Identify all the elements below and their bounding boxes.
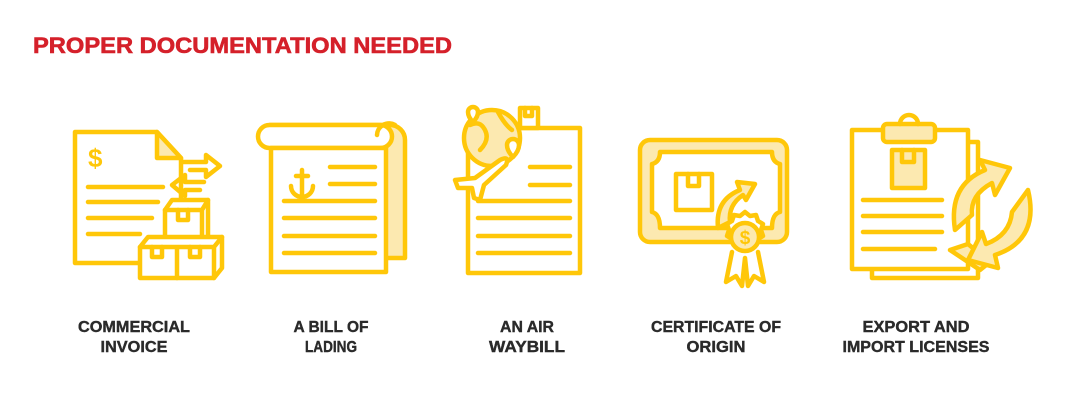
label: commercial invoice: INVOICE — [100, 339, 168, 356]
label: certificate of origin — [651, 319, 781, 356]
label: commercial invoice: COMMERCIAL — [78, 319, 190, 336]
label: export and import licenses: EXPORT AND — [862, 319, 970, 336]
label: certificate of origin: ORIGIN — [686, 339, 746, 356]
icon: export and import licenses — [852, 115, 1031, 278]
label: export and import licenses: IMPORT LICENSES — [842, 339, 990, 356]
label: bill of lading: A BILL OF — [294, 319, 369, 336]
label: air waybill: WAYBILL — [489, 339, 565, 356]
icon: commercial invoice — [75, 132, 222, 278]
icon: air waybill — [455, 107, 580, 273]
label: commercial invoice — [78, 319, 190, 356]
label: air waybill — [489, 319, 565, 356]
label: certificate of origin: CERTIFICATE OF — [651, 319, 781, 336]
label: bill of lading: LADING — [305, 339, 357, 356]
icon: certificate of origin: $ — [740, 228, 751, 249]
label: bill of lading — [294, 319, 369, 356]
icon: commercial invoice: $ — [88, 143, 103, 173]
title: PROPER DOCUMENTATION NEEDED — [33, 33, 452, 58]
labels — [78, 319, 990, 356]
label: air waybill: AN AIR — [500, 319, 554, 336]
icon: bill of lading — [258, 123, 405, 272]
label: export and import licenses — [842, 319, 990, 356]
icon: certificate of origin — [640, 140, 787, 286]
